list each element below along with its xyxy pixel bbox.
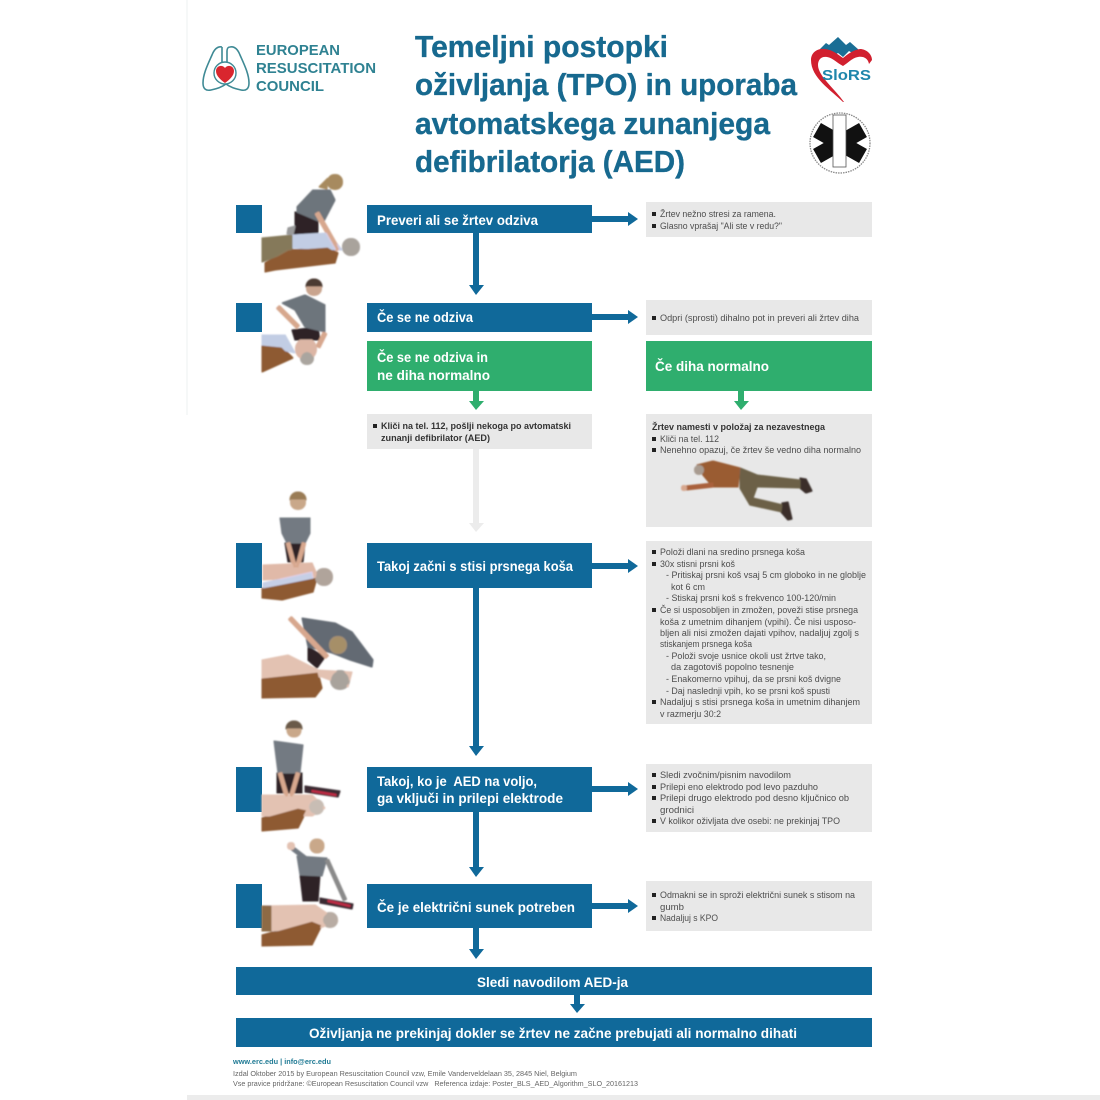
instructions: Nadaljuj s KPO [660,913,718,923]
call 112 note: Kliči na tel. 112, pošlji nekoga po avtomatski [381,421,571,431]
heading box: Če je električni sunek potreben [377,898,575,915]
instructions: Žrtev nežno stresi za ramena. [660,209,776,219]
footer: www.erc.edu | info@erc.edu [232,1057,331,1066]
green arrow [469,391,484,410]
banner: follow AED: Sledi navodilom AED-ja [477,974,628,990]
logo: star of life [810,113,870,173]
logo wordmark: COUNCIL [256,78,324,95]
footer: Izdal Oktober 2015 by European Resuscitation Council vzw, Emile Vanderveldelaan 35, 2845 Niel, Belgium [233,1071,577,1078]
instructions: Če si usposobljen in zmožen, poveži stise prsnega [660,605,858,615]
heading box: Če se ne odziva [377,308,473,325]
arrow down [469,928,484,959]
heading box [367,884,592,928]
heading box: ga vključi in prilepi elektrode [377,790,563,806]
step number tile [236,543,262,588]
instructions: - Daj naslednji vpih, ko se prsni koš spusti [666,686,830,696]
green heading [646,341,872,391]
recovery position panel: Nenehno opazuj, če žrtev še vedno diha normalno [660,445,861,455]
logo wordmark [256,42,376,95]
branch: breathing normally [646,341,872,527]
instructions: Položi dlani na sredino prsnega koša [660,547,805,557]
illustration: rescue breaths [262,618,373,698]
instructions: V kolikor oživljata dve osebi: ne prekinjaj TPO [660,816,840,826]
arrow down [469,812,484,877]
call 112 note: zunanji defibrilator (AED) [381,433,490,443]
heading box: Takoj začni s stisi prsnega koša [377,558,573,574]
title: Temeljni postopki [415,29,668,64]
green heading: ne diha normalno [377,367,490,383]
heading box [367,303,592,332]
banner: do not stop [236,1018,872,1047]
logo: SloRS: SloRS [822,68,871,84]
step 1: check response [236,174,872,272]
icon: lungs and heart [203,47,249,90]
instructions: stiskanjem prsnega koša [660,639,752,649]
instructions: Prilepi eno elektrodo pod levo pazduho [660,782,818,792]
instructions [646,300,872,335]
call 112 note [367,414,592,449]
recovery position panel [646,414,872,527]
footer: Vse pravice pridržane: ©European Resuscitation Council vzw Referenca izdaje: Poster_BLS_AED_Algorithm_SLO_20161213 [233,1080,638,1088]
instructions: - Pritiskaj prsni koš vsaj 5 cm globoko in ne globlje [666,570,866,580]
instructions: - Položi svoje usnice okoli ust žrtve tako, [666,651,826,661]
instructions: Odpri (sprosti) dihalno pot in preveri ali žrtev diha [660,313,859,323]
step 3: chest compressions [236,492,872,724]
instructions [646,541,872,724]
logo: European Resuscitation Council [203,42,376,95]
instructions: grodnici [660,805,694,815]
instructions: da zagotoviš popolno tesnenje [671,662,794,672]
arrow: light grey connector [469,449,484,532]
arrow down [570,995,585,1013]
heading box: Preveri ali se žrtev odziva [377,212,538,228]
instructions: kot 6 cm [671,582,705,592]
title: oživljanja (TPO) in uporaba [415,67,798,102]
green heading: Če diha normalno [655,357,769,374]
title: avtomatskega zunanjega [415,106,771,141]
step 4: attach AED [236,721,872,832]
arrow down [469,233,484,295]
instructions: Glasno vprašaj "Ali ste v redu?" [660,221,782,231]
instructions: Sledi zvočnim/pisnim navodilom [660,770,791,780]
instructions: - Stiskaj prsni koš s frekvenco 100-120/min [666,593,836,603]
step number tile [236,767,262,812]
illustration: recovery position [682,461,812,520]
heading box: Takoj, ko je AED na voljo, [377,773,537,789]
title: defibrilatorja (AED) [415,144,685,179]
arrow right [592,310,638,324]
footer [232,1057,638,1088]
step 5: shock [236,839,872,946]
illustration: AED pads [262,721,340,831]
instructions: 30x stisni prsni koš [660,559,736,569]
instructions: Odmakni se in sproži električni sunek s stisom na [660,890,855,900]
recovery position panel: Kliči na tel. 112 [660,434,719,444]
logo wordmark: EUROPEAN [256,42,340,59]
arrow right [592,782,638,796]
instructions: Nadaljuj s stisi prsnega koša in umetnim dihanjem [660,697,860,707]
banner: follow AED [236,967,872,995]
step number tile [236,303,262,332]
instructions [646,202,872,237]
arrow right [592,212,638,226]
step 2: open airway [236,279,872,372]
logo wordmark: RESUSCITATION [256,60,376,77]
heading box [367,767,592,812]
step number tile [236,884,262,928]
heading box [367,543,592,588]
logo: SloRS [811,37,872,102]
branch: not breathing [367,341,592,449]
instructions: v razmerju 30:2 [660,709,721,719]
illustration: rescuer opening airway [262,279,325,372]
instructions: koša z umetnim dihanjem (vpihi). Če nisi usposo- [660,617,856,627]
arrow right [592,899,638,913]
illustration: rescuer shaking victim [262,174,360,272]
instructions: - Enakomerno vpihuj, da se prsni koš dvigne [666,674,841,684]
illustration: stand clear and press shock [262,839,353,946]
instructions [646,764,872,832]
instructions: bljen ali nisi zmožen dajati vpihov, nadaljuj zgolj s [660,628,860,638]
title [415,29,798,179]
instructions: Prilepi drugo elektrodo pod desno ključnico ob [660,793,849,803]
green heading: Če se ne odziva in [377,348,488,365]
instructions: gumb [660,902,684,912]
illustration: chest compressions [262,492,332,600]
step number tile [236,205,262,233]
recovery position panel: Žrtev namesti v položaj za nezavestnega [652,421,825,432]
heading box [367,205,592,233]
arrow down [469,588,484,756]
instructions [646,881,872,931]
arrow right [592,559,638,573]
green heading [367,341,592,391]
green arrow [734,391,749,410]
banner: do not stop: Oživljanja ne prekinjaj dokler se žrtev ne začne prebujati ali normalno dihati [309,1025,797,1041]
